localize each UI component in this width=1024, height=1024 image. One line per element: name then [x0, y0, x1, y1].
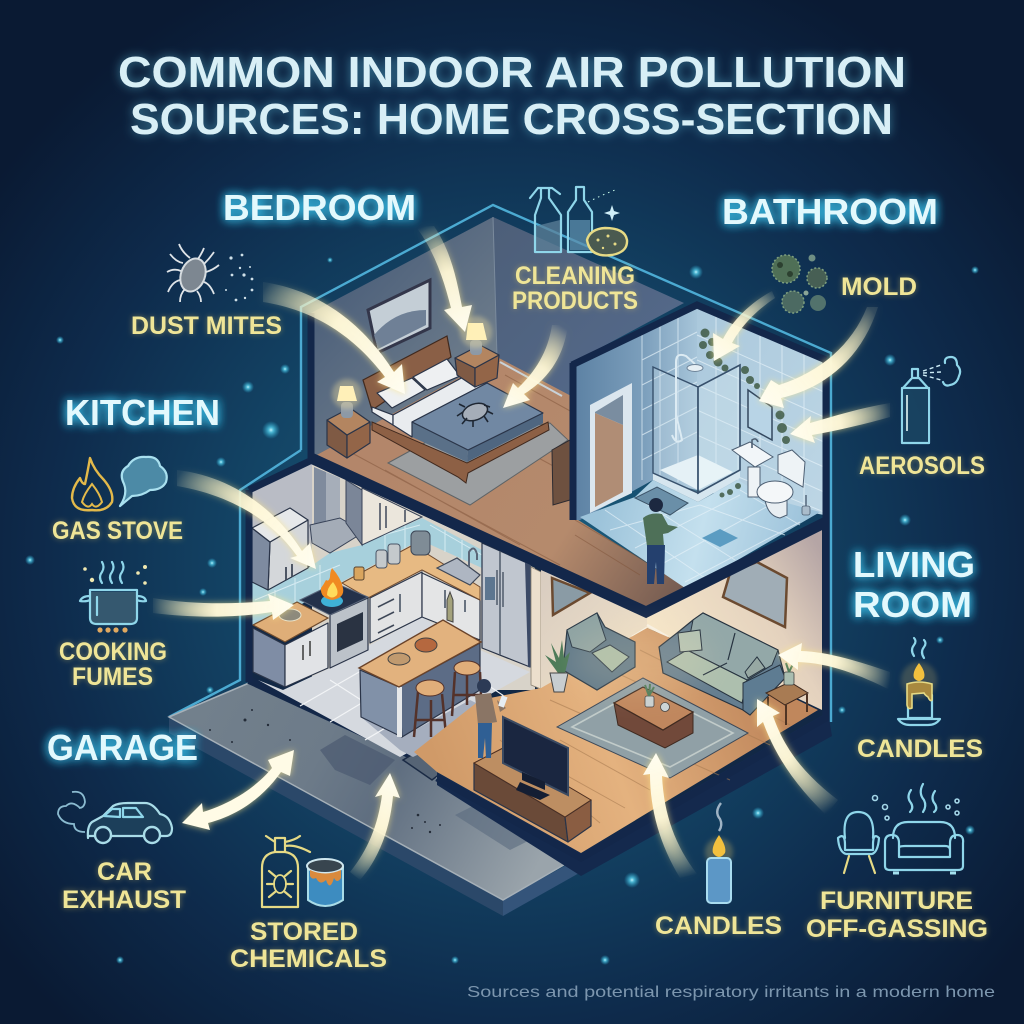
label: mold: MOLD: [841, 273, 917, 301]
icon: cooking pot: [80, 562, 147, 633]
panel: living room: [414, 524, 822, 853]
heading: living room: ROOM: [853, 584, 972, 625]
doorway: [590, 383, 632, 513]
label: cleaning products: PRODUCTS: [512, 287, 638, 315]
heading: kitchen: KITCHEN: [65, 392, 220, 433]
arrow: candles right: [778, 643, 890, 690]
label: furniture off-gassing: FURNITURE: [820, 887, 973, 915]
left nightstand and lamp: [327, 379, 370, 458]
arrow: furniture off-gassing: [757, 699, 838, 815]
icon: candle centre: [705, 803, 733, 903]
label: stored chemicals: [230, 918, 387, 973]
title: [118, 48, 906, 144]
foundation band: [437, 712, 832, 876]
icon: mold spores: [772, 254, 827, 313]
arrow: candles centre: [643, 753, 697, 878]
label: cleaning products: CLEANING: [515, 262, 635, 290]
bed: [363, 336, 549, 483]
arrow: mold to mirror: [759, 307, 878, 408]
label: candles right: CANDLES: [857, 735, 983, 763]
refrigerator: [482, 543, 541, 689]
heading: living room: [853, 544, 975, 625]
label: candles centre: CANDLES: [655, 912, 782, 940]
icon: dust mite: [167, 244, 253, 302]
mirror: [748, 390, 772, 440]
label: furniture off-gassing: [806, 887, 988, 943]
left counter: [253, 602, 328, 687]
panel: bedroom: [311, 217, 690, 610]
label: cooking fumes: COOKING: [59, 638, 167, 666]
warm living glow: [570, 625, 710, 695]
back counter: [342, 531, 480, 643]
label: aerosols: AEROSOLS: [859, 452, 985, 480]
stove with flame: [300, 568, 368, 668]
panel: kitchen: [250, 463, 541, 757]
label: cooking fumes: FUMES: [72, 663, 153, 691]
upper cabinets: [346, 480, 422, 545]
house cross-section: [169, 217, 832, 916]
exterior wall edges: [249, 313, 826, 858]
arrow: dust mites: [263, 282, 405, 394]
label: cleaning products: [512, 262, 638, 315]
label: furniture off-gassing: OFF-GASSING: [806, 915, 988, 943]
lower interior base: [249, 458, 828, 857]
arrow: stored chemicals: [350, 773, 400, 880]
bathroom walls: [572, 305, 826, 520]
icon: pesticide spray and paint can: [262, 836, 343, 907]
label: dust mites: DUST MITES: [131, 312, 282, 340]
arrow: car exhaust: [182, 750, 294, 830]
arrow: mold to shower: [713, 291, 775, 361]
living walls: [541, 524, 822, 710]
shower enclosure: [653, 355, 740, 502]
icon: cleaning products: [530, 187, 627, 255]
toilet: [757, 450, 810, 518]
kitchen walls: [250, 463, 535, 690]
dust mite on bed: [457, 400, 493, 427]
kitchen resident: [475, 679, 508, 758]
arrow: aerosols: [790, 403, 890, 443]
label: car exhaust: EXHAUST: [62, 886, 186, 914]
label: stored chemicals: STORED: [250, 918, 358, 946]
label: gas stove: GAS STOVE: [52, 517, 183, 545]
sofa: [659, 613, 785, 715]
heading: living room: LIVING: [853, 544, 975, 585]
bedroom walls: [311, 217, 684, 458]
rug: [388, 423, 568, 505]
arrow: cooking fumes: [153, 594, 294, 620]
range hood: [310, 467, 364, 553]
side table: [766, 663, 808, 725]
bedroom floor: [311, 357, 690, 610]
icon: armchair and sofa: [838, 784, 963, 873]
heading: bedroom: BEDROOM: [223, 187, 416, 228]
title: COMMON INDOOR AIR POLLUTION: [118, 48, 906, 97]
wall painting: [368, 280, 430, 353]
floating particles: [25, 257, 979, 965]
panel: bathroom: [572, 305, 826, 590]
label: cooking fumes: [59, 638, 167, 691]
footer note: Sources and potential respiratory irritants in a modern home: [467, 984, 995, 1001]
arrow: bedroom: [416, 226, 472, 332]
icon: gas flame and smoke: [72, 457, 167, 510]
label: car exhaust: CAR: [97, 858, 152, 886]
heading: bathroom: BATHROOM: [722, 191, 938, 232]
rug: [557, 678, 748, 778]
wood floor: [414, 628, 818, 853]
mold patches: [699, 328, 790, 498]
tv console and television: [474, 717, 591, 842]
icon: car with exhaust: [58, 792, 172, 843]
kitchen tile floor: [258, 617, 530, 757]
floor slab edge: [311, 458, 826, 612]
dresser: [552, 440, 570, 505]
right nightstand and lamp: [455, 316, 499, 387]
label: car exhaust: [62, 858, 186, 914]
living paintings: [552, 562, 787, 627]
title: SOURCES: HOME CROSS-SECTION: [130, 95, 893, 144]
coffee table: [614, 684, 693, 748]
bathroom resident: [643, 498, 678, 584]
bathroom floor: [580, 480, 820, 590]
sink: [732, 439, 773, 497]
arrow: gas stove: [177, 470, 316, 569]
island and stools: [359, 592, 482, 737]
label: stored chemicals: CHEMICALS: [230, 945, 387, 973]
garage slab: [169, 680, 581, 916]
heading: garage: GARAGE: [47, 727, 198, 768]
icon: aerosol can: [902, 357, 960, 443]
house outer cyan outline: [169, 205, 831, 722]
armchair: [563, 613, 635, 690]
left wall cabinets: [252, 508, 308, 590]
plant pot: [545, 640, 570, 692]
icon: candle right: [898, 638, 940, 725]
arrow: cleaning products: [503, 325, 568, 408]
